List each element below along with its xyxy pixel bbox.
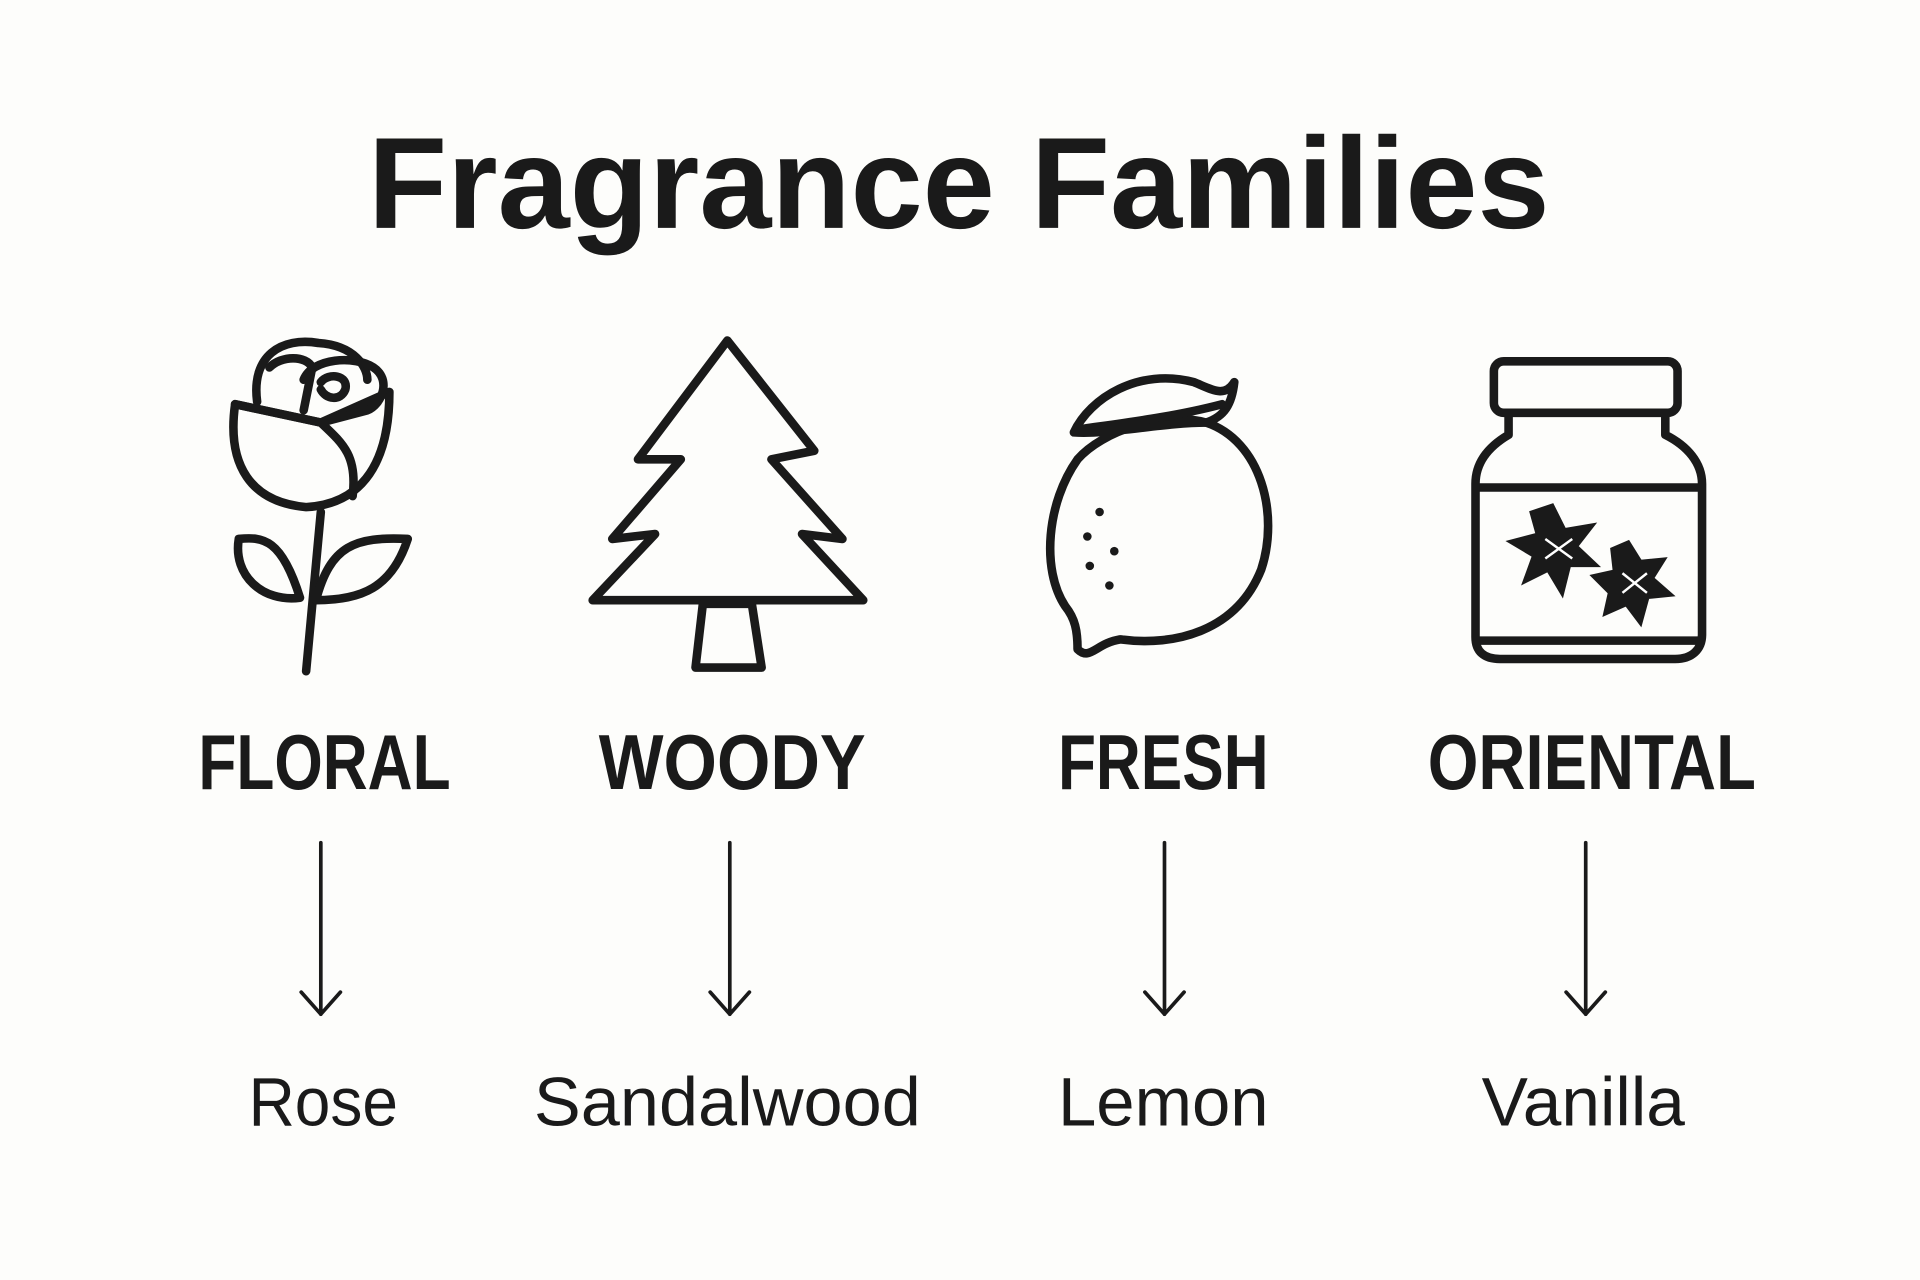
example notes (249, 1064, 1686, 1141)
example notes: Lemon (1058, 1064, 1269, 1141)
category labels: WOODY (599, 718, 866, 806)
arrows (301, 843, 1605, 1014)
icon: jar (1476, 361, 1702, 659)
category labels: FLORAL (198, 718, 451, 806)
title: Fragrance Families (368, 110, 1550, 256)
category labels: ORIENTAL (1428, 718, 1756, 806)
category labels (198, 718, 1756, 806)
category labels: FRESH (1058, 718, 1269, 806)
example notes: Sandalwood (534, 1064, 921, 1141)
icon: lemon (1050, 378, 1268, 653)
icon: tree (593, 341, 863, 668)
example notes: Vanilla (1482, 1064, 1686, 1141)
icon: rose (233, 342, 408, 671)
example notes: Rose (249, 1064, 398, 1141)
